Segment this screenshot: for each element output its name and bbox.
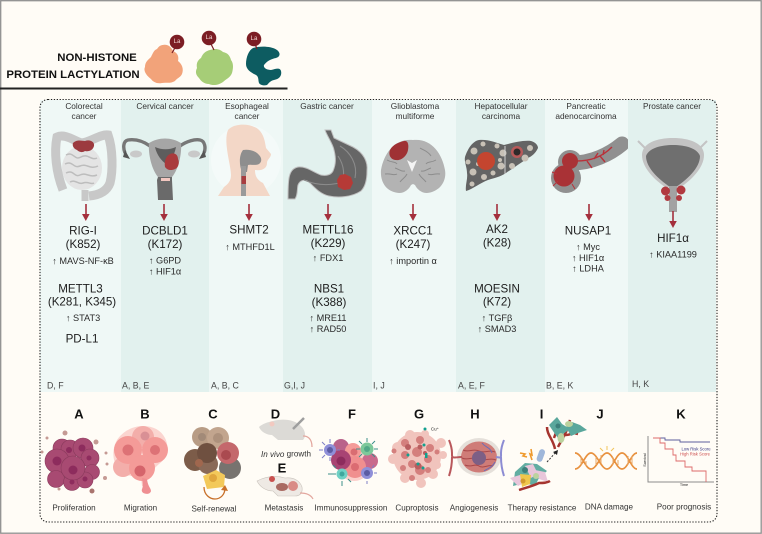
panel: Hepatocellular carcinoma: [456, 100, 545, 392]
panel: Prostate cancer: [628, 100, 716, 392]
panel: Glioblastoma multiforme: ↑ importin α: [389, 256, 438, 266]
icon: green lactylated protein: La: [206, 35, 213, 41]
title: [0, 52, 288, 90]
hallmark G: cuproptosis: Cu⁺: [431, 426, 440, 432]
panel: Cervical cancer: Cervical cancer: [136, 101, 194, 111]
icon: teal lactylated protein: La: [251, 36, 258, 42]
panel: Colorectal cancer: (K852): [66, 238, 101, 251]
hallmark F: immunosuppression: [315, 406, 387, 512]
panel: Gastric cancer: [283, 100, 372, 392]
panel: Gastric cancer: (K388): [312, 296, 347, 309]
icon: teal lactylated protein: [246, 32, 281, 85]
icon: pancreas with tumors: [551, 144, 622, 193]
panel: Colorectal cancer: ↑ STAT3: [66, 313, 100, 323]
panel: Glioblastoma multiforme: [372, 100, 456, 392]
hallmark K: poor prognosis survival chart: Survival: [643, 453, 647, 467]
hallmark C: self-renewal: Self-renewal: [192, 504, 237, 514]
hallmark C: self-renewal: C: [208, 406, 218, 422]
panel: Colorectal cancer: (K281, K345): [48, 296, 116, 308]
hallmark K: poor prognosis survival chart: [643, 406, 714, 512]
panel: Prostate cancer: HIF1α: [657, 232, 689, 245]
panel: Prostate cancer: Prostate cancer: [643, 101, 701, 111]
panel: Colorectal cancer: D, F: [47, 380, 64, 390]
panel: Gastric cancer: METTL16: [303, 224, 353, 236]
panel: Hepatocellular carcinoma: MOESIN: [474, 282, 520, 296]
panel: Hepatocellular carcinoma: carcinoma: [482, 111, 521, 121]
panel: Colorectal cancer: RIG-I: [69, 224, 97, 238]
panel: Hepatocellular carcinoma: A, E, F: [458, 380, 486, 390]
hallmark G: cuproptosis: Cuproptosis: [395, 504, 439, 512]
hallmark K: poor prognosis survival chart: K: [676, 406, 686, 422]
panel: Pancreatic adenocarcinoma: ↑ Myc: [576, 242, 600, 252]
hallmark B: migration: B: [140, 406, 150, 422]
arrow: [585, 204, 593, 221]
panel: Cervical cancer: ↑ G6PD: [149, 256, 181, 266]
panel: Cervical cancer: DCBLD1: [142, 224, 188, 238]
panel: Esophageal cancer: Esophageal: [225, 101, 269, 111]
panel: Pancreatic adenocarcinoma: [545, 100, 628, 392]
hallmark D: in vivo growth: D: [271, 406, 280, 422]
hallmark F: immunosuppression: Immunosuppression: [315, 504, 387, 512]
hallmark K: poor prognosis survival chart: Low Risk Score: [681, 446, 711, 452]
hallmark K: poor prognosis survival chart: Time: [680, 483, 688, 487]
icon: orange lactylated protein: La: [174, 39, 181, 45]
panel: Colorectal cancer: [40, 100, 121, 392]
arrow: [669, 211, 677, 228]
title: PROTEIN LACTYLATION: [6, 69, 140, 81]
panel: Cervical cancer: (K172): [148, 238, 183, 251]
icon: green lactylated protein: [196, 31, 233, 85]
panel: Pancreatic adenocarcinoma: NUSAP1: [565, 224, 611, 238]
panel: Gastric cancer: ↑ RAD50: [310, 324, 346, 334]
panel: Colorectal cancer: Colorectal: [65, 101, 103, 111]
hallmark E: metastasis: E: [278, 460, 287, 476]
hallmark A: proliferation: [40, 406, 108, 512]
dotted frame: [40, 100, 717, 522]
panel: Gastric cancer: ↑ FDX1: [313, 253, 343, 263]
panel: Glioblastoma multiforme: I, J: [373, 380, 385, 390]
icon: liver with tumors: [465, 140, 538, 191]
hallmark E: metastasis: Metastasis: [265, 504, 303, 512]
hallmark K: poor prognosis survival chart: High Risk Score: [680, 452, 711, 456]
panel: Hepatocellular carcinoma: ↑ SMAD3: [478, 324, 516, 334]
panel: Esophageal cancer: SHMT2: [229, 224, 269, 236]
arrow: [160, 204, 168, 221]
panel: Hepatocellular carcinoma: ↑ TGFβ: [482, 313, 512, 323]
hallmark E: metastasis: [257, 460, 313, 512]
hallmark I: therapy resistance: Therapy resistance: [508, 504, 577, 512]
panel: Hepatocellular carcinoma: (K72): [483, 296, 511, 308]
icon: head and neck with esophageal tumor: [211, 125, 281, 196]
panel: Gastric cancer: Gastric cancer: [300, 101, 354, 111]
panel: Gastric cancer: NBS1: [314, 282, 344, 296]
icon: orange lactylated protein: [144, 35, 184, 83]
panel: Pancreatic adenocarcinoma: Pancreatic: [566, 101, 606, 111]
hallmark K: poor prognosis survival chart: Poor prognosis: [657, 502, 711, 512]
hallmark A: proliferation: A: [74, 406, 84, 422]
arrow: [493, 204, 501, 221]
hallmark J: DNA damage: [575, 406, 637, 512]
icon: stomach with tumor: [288, 130, 367, 199]
panel: Esophageal cancer: A, B, C: [211, 380, 240, 390]
panel: Glioblastoma multiforme: XRCC1: [393, 224, 433, 238]
panel: Hepatocellular carcinoma: AK2: [486, 223, 508, 236]
panel: Cervical cancer: [121, 100, 209, 392]
arrow: [82, 204, 90, 221]
panel: Esophageal cancer: ↑ MTHFD1L: [225, 242, 275, 252]
icon: uterus with tumor: [123, 138, 206, 200]
panel: Gastric cancer: ↑ MRE11: [309, 313, 347, 323]
panel: Prostate cancer: ↑ KIAA1199: [649, 250, 697, 260]
panel: Pancreatic adenocarcinoma: adenocarcinoma: [555, 111, 617, 121]
panel: Colorectal cancer: METTL3: [58, 282, 103, 296]
icon: colon with tumor: [56, 135, 112, 201]
panel: Cervical cancer: ↑ HIF1α: [149, 266, 182, 276]
arrow: [409, 204, 417, 221]
hallmark D: in vivo growth: [259, 406, 312, 458]
panel: Pancreatic adenocarcinoma: ↑ HIF1α: [572, 253, 605, 263]
hallmark H: angiogenesis: [449, 406, 504, 512]
hallmark B: migration: [113, 406, 168, 512]
hallmark H: angiogenesis: Angiogenesis: [450, 504, 498, 512]
arrow: [324, 204, 332, 221]
panel: Gastric cancer: (K229): [311, 237, 346, 250]
arrow: [245, 204, 253, 221]
panel: Glioblastoma multiforme: (K247): [396, 238, 431, 251]
panel: Esophageal cancer: cancer: [235, 111, 260, 121]
panel: Colorectal cancer: ↑ MAVS-NF-κB: [52, 256, 114, 266]
hallmark J: DNA damage: J: [596, 406, 604, 422]
hallmark A: proliferation: Proliferation: [52, 504, 96, 512]
icon: brain with tumor: [381, 140, 445, 193]
hallmark D: in vivo growth: In vivo growth: [261, 450, 311, 458]
icon: bladder and prostate: [638, 138, 707, 212]
hallmark H: angiogenesis: H: [470, 406, 480, 422]
hallmark B: migration: Migration: [124, 504, 157, 512]
panel: Esophageal cancer: [209, 100, 283, 392]
hallmark F: immunosuppression: F: [348, 406, 356, 422]
panel: Glioblastoma multiforme: Glioblastoma: [391, 101, 440, 111]
panel: Glioblastoma multiforme: multiforme: [396, 111, 435, 121]
panel: Gastric cancer: G,I, J: [284, 380, 305, 390]
hallmark G: cuproptosis: G: [414, 406, 424, 422]
panel: Hepatocellular carcinoma: (K28): [483, 236, 511, 250]
hallmark J: DNA damage: DNA damage: [585, 502, 634, 512]
panel: Hepatocellular carcinoma: Hepatocellular: [474, 101, 528, 111]
hallmark G: cuproptosis: [388, 406, 447, 512]
title: NON-HISTONE: [57, 52, 137, 64]
hallmark I: therapy resistance: [508, 406, 587, 512]
panel: Colorectal cancer: cancer: [72, 111, 97, 121]
hallmark I: therapy resistance: I: [540, 406, 543, 422]
panel: Prostate cancer: H, K: [632, 379, 649, 389]
panel: Colorectal cancer: PD-L1: [66, 332, 98, 346]
panel: Pancreatic adenocarcinoma: ↑ LDHA: [572, 264, 605, 274]
panel: Cervical cancer: A, B, E: [122, 380, 150, 390]
panel: Pancreatic adenocarcinoma: B, E, K: [546, 380, 574, 390]
hallmark C: self-renewal: [184, 406, 241, 514]
